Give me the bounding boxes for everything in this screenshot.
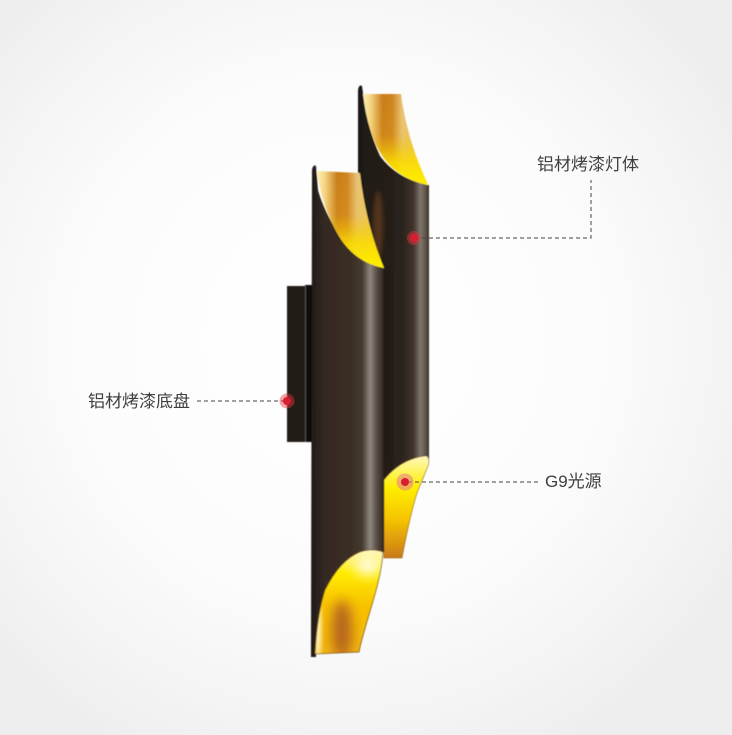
back tube [358, 86, 429, 558]
tube seam shadow [384, 268, 390, 458]
wall lamp [287, 86, 429, 660]
marker: lamp body [407, 231, 421, 245]
label: lamp body: 铝材烤漆灯体 [537, 155, 639, 174]
reflection on back tube [373, 191, 383, 259]
front tube [311, 166, 384, 660]
mounting bracket [287, 285, 312, 442]
top gold opening: back tube [363, 94, 428, 185]
marker: base plate [280, 394, 294, 408]
label: light source: G9光源 [545, 472, 602, 491]
callout: light source [396, 472, 602, 491]
bottom gold opening: front tube [315, 550, 383, 660]
marker: light source [396, 474, 414, 490]
lower gold opening: back tube [384, 456, 429, 558]
top gold opening: front tube [317, 171, 384, 268]
callout: body [407, 155, 639, 245]
label: base plate: 铝材烤漆底盘 [88, 392, 190, 411]
callout: base plate [88, 392, 294, 411]
